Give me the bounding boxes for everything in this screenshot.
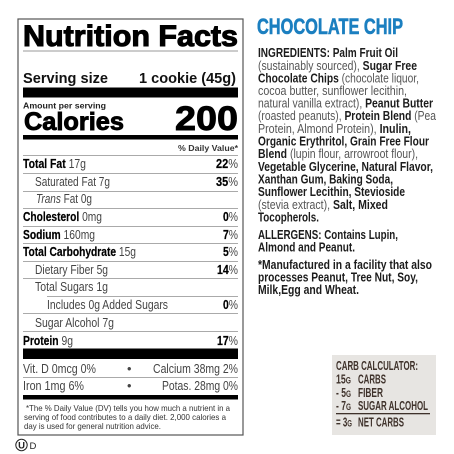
footnote: day is used for general nutrition advice.	[24, 421, 161, 431]
serving size row: 1 cookie (45g)	[139, 70, 236, 87]
carbs row: 15G	[336, 372, 351, 386]
ingredients text: (sustainably sourced), Sugar Free	[258, 58, 417, 73]
nutrient rows: 22%	[216, 156, 238, 171]
title: Nutrition Facts: Nutrition Facts	[23, 20, 238, 53]
nutrient rows	[23, 156, 238, 348]
allergens text	[258, 227, 398, 254]
ingredients text: cocoa butter, sunflower lecithin,	[258, 83, 407, 98]
allergens text: Almond and Peanut.	[258, 240, 355, 254]
ingredients text: Protein, Almond Protein), Inulin,	[258, 121, 411, 136]
nutrient rows: 5%	[223, 244, 238, 259]
carbs row	[336, 372, 386, 386]
serving size row	[23, 70, 236, 87]
allergens text: ALLERGENS: Contains Lupin,	[258, 227, 398, 242]
ingredients text: INGREDIENTS: Palm Fruit Oil	[258, 45, 398, 60]
footnote	[24, 403, 230, 431]
net carbs row: NET CARBS	[358, 416, 404, 430]
nutrient rows: Saturated Fat 7g	[35, 174, 110, 189]
vitamins and minerals: Vit. D 0mcg 0%	[23, 361, 96, 376]
calories block: 200	[175, 100, 238, 138]
nutrient rows: Trans Fat 0g	[36, 191, 92, 206]
facility warning text	[258, 257, 432, 297]
icon: kosher dairy mark: U	[18, 440, 25, 452]
ingredients text	[258, 45, 437, 224]
heading: flavor name: CHOCOLATE CHIP	[257, 14, 403, 39]
calories block: Amount per serving	[23, 102, 106, 110]
fiber row: FIBER	[358, 386, 383, 400]
nutrient rows: 0%	[223, 297, 238, 312]
nutrient rows: 7%	[223, 227, 238, 242]
ingredients text: Tocopherols.	[258, 210, 319, 224]
nutrient rows: Sodium 160mg	[23, 227, 95, 242]
nutrient rows: 17%	[217, 333, 238, 348]
vitamins and minerals	[23, 361, 238, 393]
net carbs row: = 3G	[336, 416, 352, 430]
facility warning text: processes Peanut, Tree Nut, Soy,	[258, 270, 418, 284]
nutrient rows: Sugar Alcohol 7g	[35, 315, 114, 330]
vitamins and minerals: Potas. 28mg 0%	[162, 378, 238, 393]
vitamins and minerals: •	[127, 378, 131, 393]
vitamins and minerals: Calcium 38mg 2%	[153, 361, 238, 376]
nutrient rows: Cholesterol 0mg	[23, 209, 102, 224]
sugar alcohol row	[336, 399, 428, 413]
ingredients text: natural vanilla extract), Peanut Butter	[258, 96, 433, 110]
icon: kosher dairy mark: D	[30, 441, 36, 452]
nutrient rows: 14%	[217, 262, 238, 277]
facility warning text: Milk,Egg and Wheat.	[258, 282, 359, 297]
icon: kosher dairy mark	[16, 439, 37, 452]
ingredients text: (stevia extract), Salt, Mixed	[258, 197, 388, 212]
serving size row: Serving size	[23, 70, 108, 87]
footnote: *The % Daily Value (DV) tells you how much a nutrient in a	[26, 403, 230, 413]
nutrient rows: Total Carbohydrate 15g	[23, 244, 136, 259]
vitamins and minerals: Iron 1mg 6%	[23, 378, 84, 393]
carbs row: CARBS	[358, 372, 386, 386]
calories block: Calories	[24, 108, 124, 136]
sugar alcohol row: - 7G	[336, 399, 351, 413]
vitamins and minerals: •	[127, 361, 131, 376]
nutrient rows: Includes 0g Added Sugars	[47, 297, 168, 312]
calories block	[23, 100, 238, 138]
footnote: serving of food contributes to a daily diet. 2,000 calories a	[24, 412, 226, 422]
nutrient rows: 0%	[223, 209, 238, 224]
nutrient rows: Dietary Fiber 5g	[35, 262, 108, 277]
nutrient rows: Total Fat 17g	[23, 156, 86, 171]
ingredients text: Sunflower Lecithin, Stevioside	[258, 184, 405, 199]
net carbs row	[336, 416, 404, 430]
ingredients text: Chocolate Chips (chocolate liquor,	[258, 70, 419, 86]
nutrient rows: 35%	[216, 174, 238, 189]
fiber row: - 5G	[336, 386, 351, 400]
nutrient rows: Protein 9g	[23, 333, 73, 348]
panel: carb calculator	[332, 355, 436, 435]
ingredients text: Xanthan Gum, Baking Soda,	[258, 172, 393, 186]
ingredients text: Blend (lupin flour, arrowroot flour),	[258, 146, 418, 161]
ingredients text: (roasted peanuts), Protein Blend (Pea	[258, 108, 437, 123]
daily value header: % Daily Value*	[178, 144, 239, 153]
nutrient rows: Total Sugars 1g	[35, 279, 108, 294]
panel: nutrition facts label	[18, 19, 243, 435]
fiber row	[336, 386, 383, 400]
